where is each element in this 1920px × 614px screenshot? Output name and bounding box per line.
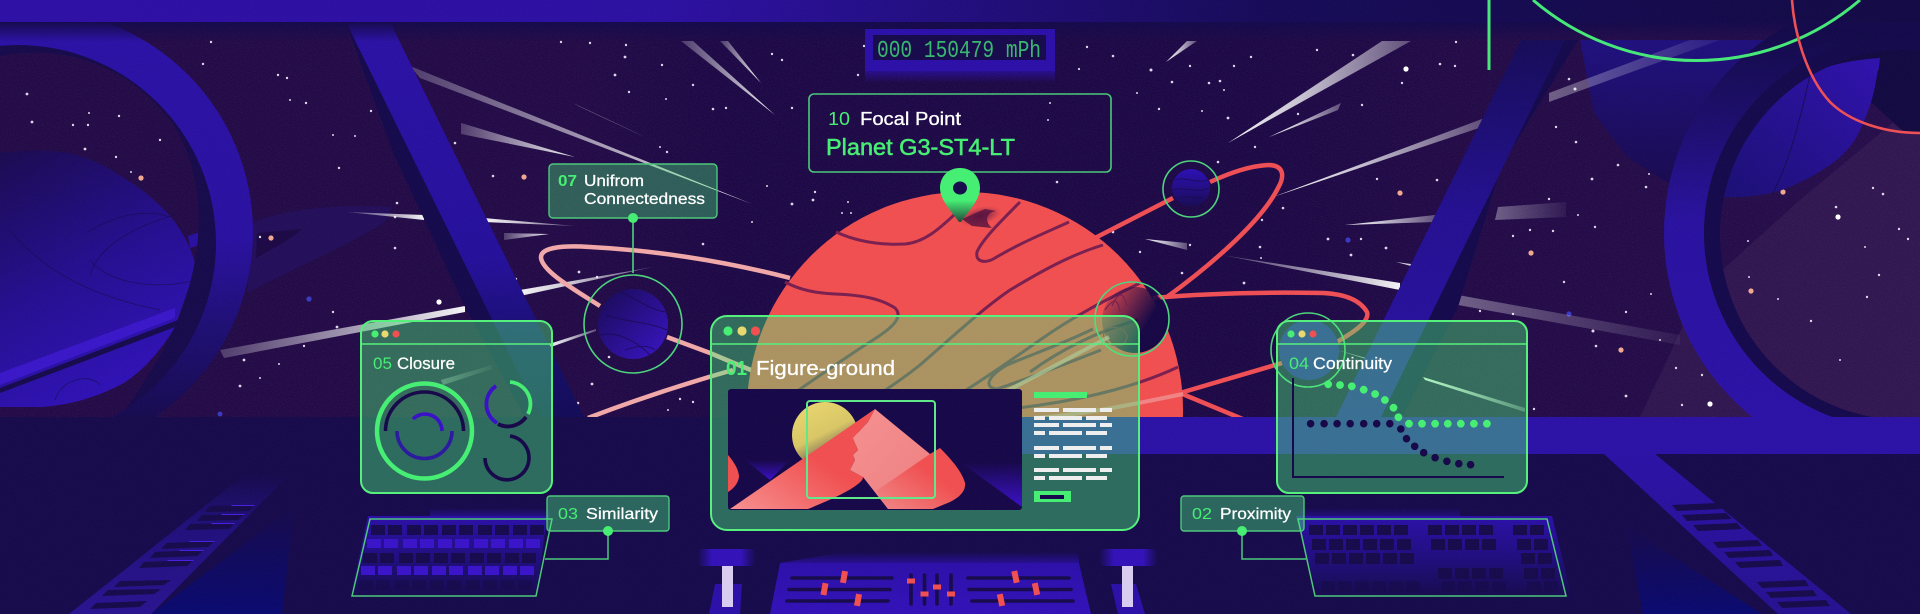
vents <box>1672 503 1830 608</box>
label text: Similarity <box>586 506 658 523</box>
label number: 07 <box>558 173 577 190</box>
orbit: pink ring <box>541 246 808 418</box>
label 03 similarity <box>545 496 669 559</box>
panel title: Closure <box>397 354 455 373</box>
label 02 proximity <box>1181 496 1306 559</box>
connector dot <box>603 526 613 536</box>
callout number: 10 <box>828 109 850 129</box>
distant planet behind right strut <box>1580 40 1774 183</box>
key rows <box>359 525 544 590</box>
top-right green overlay lines <box>1489 0 1920 133</box>
purple planet with rings: upper right small planet <box>1163 161 1219 217</box>
slider tracks <box>787 575 1073 604</box>
green dotted series <box>1324 380 1491 428</box>
right joystick <box>1099 549 1158 614</box>
icon: map pin <box>940 168 980 222</box>
window dots <box>371 330 400 338</box>
distant planet ring on the left <box>247 206 392 293</box>
keyboard left <box>350 508 552 598</box>
panel 05 closure <box>361 321 552 493</box>
callout value: Planet G3-ST4-LT <box>826 134 1015 160</box>
speedometer <box>865 29 1055 83</box>
connector <box>632 218 634 273</box>
pin shadow <box>962 207 1000 225</box>
pale orbit crossing the planet <box>1006 336 1110 389</box>
label text line two: Connectedness <box>584 191 705 208</box>
illustration <box>728 389 1022 510</box>
crater spot <box>1102 287 1168 353</box>
label number: 03 <box>558 506 578 523</box>
left purple planet with ring <box>0 151 200 407</box>
panel number: 04 <box>1289 354 1309 373</box>
speed readout: 000 150479 mPh <box>877 38 1041 65</box>
stars <box>26 41 1909 416</box>
slider knobs <box>820 570 1040 606</box>
panel 01 figure-ground <box>711 316 1139 530</box>
top frame <box>0 0 1920 42</box>
window dots <box>723 326 760 336</box>
motion streaks <box>220 40 1720 412</box>
label text: Proximity <box>1220 506 1291 523</box>
panel title: Continuity <box>1313 354 1393 373</box>
label number: 02 <box>1192 506 1212 523</box>
key rows <box>1309 525 1558 592</box>
ring around blue planet at panel 04 <box>1271 313 1345 387</box>
left joystick <box>697 549 756 614</box>
ring around crater <box>1095 282 1169 356</box>
panel title: Figure-ground <box>756 358 895 380</box>
small planet: blue disk under panel 04 <box>1279 320 1339 380</box>
orbit: red ring <box>1095 165 1367 420</box>
planet contour lines <box>785 202 1178 416</box>
chart axes <box>1293 378 1504 477</box>
window dots <box>1287 330 1317 338</box>
main red planet <box>748 192 1184 417</box>
lower wall <box>0 417 1920 614</box>
left window strut <box>346 22 584 417</box>
right porthole interior <box>1724 50 1920 198</box>
text placeholder block <box>1034 392 1112 502</box>
callout heading: Focal Point <box>860 109 961 129</box>
right porthole ring <box>1664 28 1885 417</box>
left porthole ring <box>0 45 216 409</box>
callout: 07 uniform connectedness <box>549 164 717 273</box>
right floor strut with vents <box>1604 454 1851 614</box>
label text: Unifrom <box>584 173 644 190</box>
purple planet with rings: left small planet <box>584 275 682 373</box>
space backdrop <box>0 22 1920 417</box>
closure circles <box>377 382 530 480</box>
panel number: 01 <box>726 358 747 380</box>
connector dot <box>628 213 638 223</box>
callout: 10 focal point <box>809 94 1111 172</box>
panel number: 05 <box>373 354 392 373</box>
horizontal console band <box>0 417 1920 454</box>
right window strut <box>1336 40 1578 417</box>
keyboard right <box>1296 508 1572 598</box>
dark dotted series <box>1307 420 1474 469</box>
left floor strut with vents <box>69 474 294 614</box>
panel 04 continuity <box>1277 321 1527 493</box>
center console sliders <box>770 552 1091 614</box>
connector dot <box>1237 526 1247 536</box>
